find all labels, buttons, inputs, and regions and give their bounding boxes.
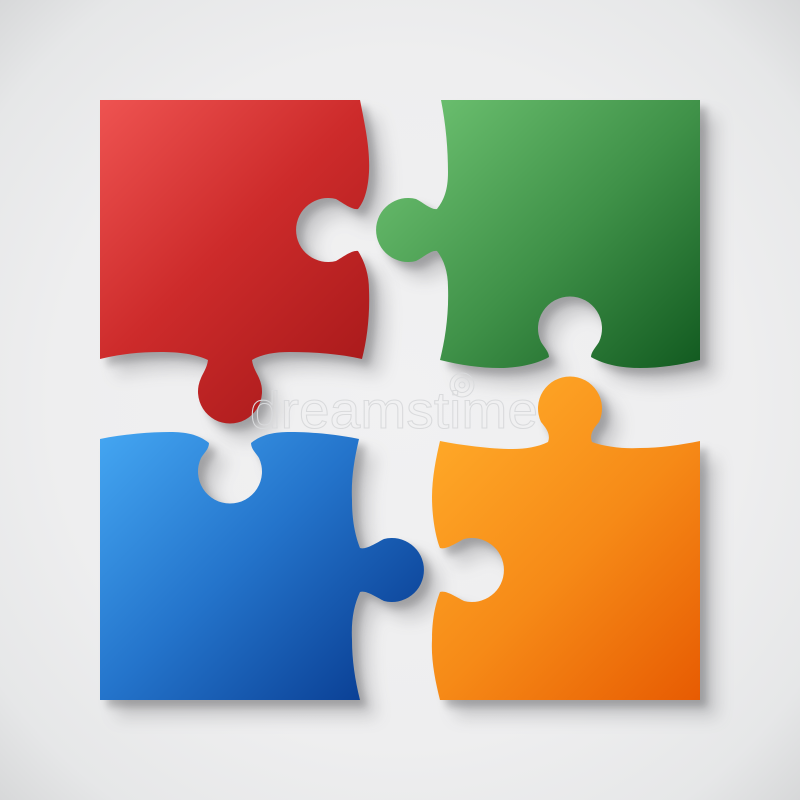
puzzle piece: orange bbox=[432, 376, 700, 700]
puzzle piece: blue bbox=[100, 432, 424, 700]
puzzle piece: green bbox=[376, 100, 700, 368]
watermark bbox=[250, 373, 538, 440]
watermark spiral icon bbox=[450, 373, 474, 397]
watermark text: dreamstime bbox=[250, 382, 538, 440]
puzzle piece: red bbox=[100, 100, 369, 424]
